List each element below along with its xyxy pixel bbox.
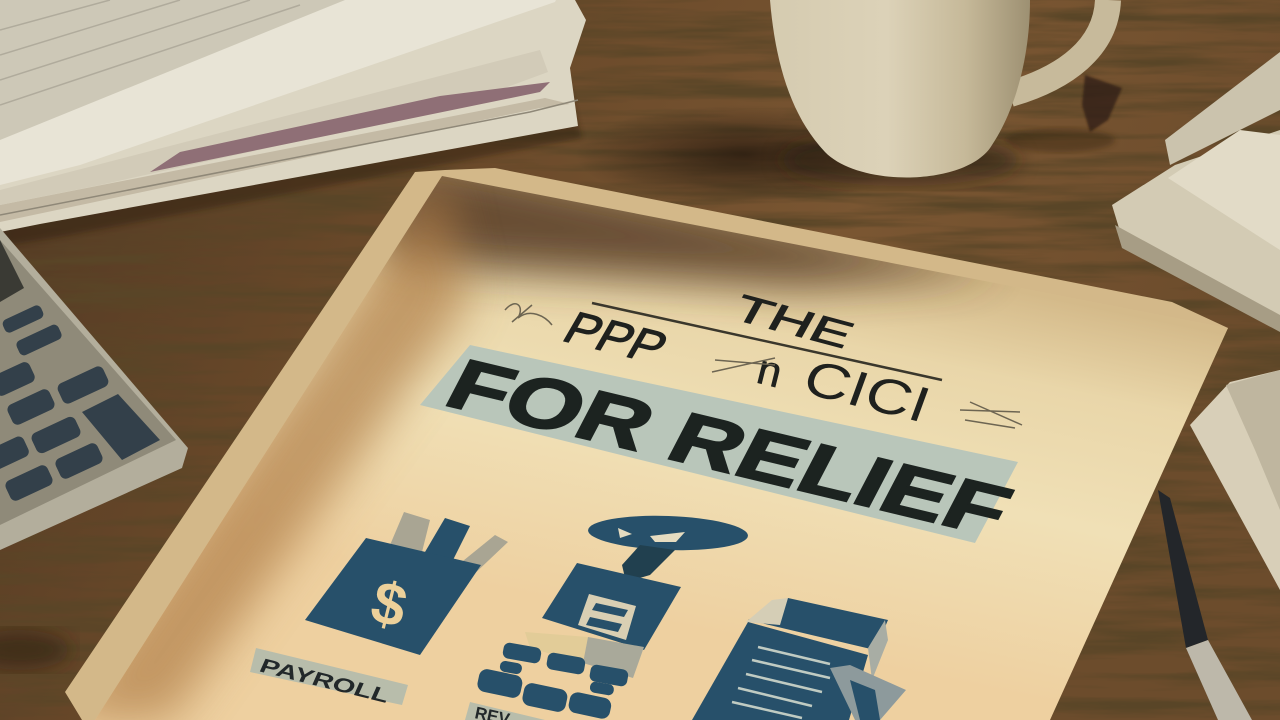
title: THE PPP: PPP (555, 303, 676, 373)
title: THE PPP (555, 288, 942, 433)
calculator (0, 228, 188, 550)
main paper document (60, 150, 1228, 720)
icon: payroll money pocket (305, 512, 508, 655)
icon: payroll money pocket: $ (365, 568, 413, 641)
icon: document (692, 598, 906, 720)
title: THE PPP: CICI (796, 350, 938, 433)
label: payroll: PAYROLL (256, 655, 393, 708)
scribble marks (505, 304, 1022, 428)
label: payroll (250, 648, 408, 708)
books and notes right (1112, 52, 1280, 590)
coffee mug (770, 0, 1108, 186)
icon: rent building with roof (525, 513, 749, 678)
title: THE PPP: n (753, 345, 787, 396)
paper stack top left (0, 0, 586, 246)
pen (1158, 490, 1252, 720)
label: rent (465, 702, 545, 720)
icon: brick pile (476, 642, 629, 720)
banner: for relief (420, 345, 1024, 551)
under sheet of paper (65, 168, 1228, 720)
title: THE PPP: THE (726, 288, 861, 357)
banner: for relief: FOR RELIEF (434, 345, 1024, 551)
